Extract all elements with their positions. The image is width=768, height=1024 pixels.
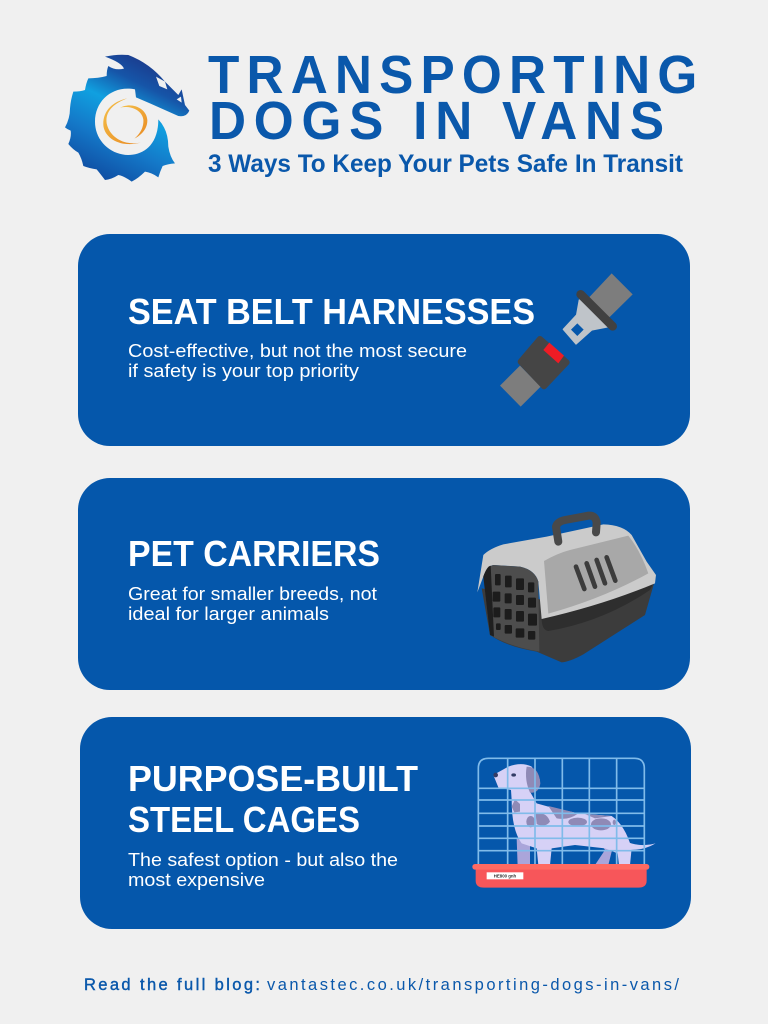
subtitle: 3 Ways To Keep Your Pets Safe In Transit bbox=[208, 150, 684, 178]
icon: dog in cage bbox=[472, 758, 656, 888]
panel: purpose-built steel cages bbox=[80, 717, 691, 929]
text: pet carriers description: ideal for larger animals bbox=[128, 603, 329, 624]
text: seat belt description: Cost-effective, but not the most secure bbox=[128, 340, 467, 361]
footer link bbox=[84, 976, 679, 994]
icon: pet carrier bbox=[477, 516, 656, 662]
heading: seat belt harnesses: SEAT BELT HARNESSES bbox=[128, 291, 535, 332]
text: steel cages description bbox=[128, 849, 398, 890]
heading: purpose-built steel cages: PURPOSE-BUILT bbox=[128, 758, 418, 799]
heading: pet carriers: PET CARRIERS bbox=[128, 533, 380, 574]
title: TRANSPORTING bbox=[208, 45, 697, 105]
text: pet carriers description: Great for smaller breeds, not bbox=[128, 583, 377, 604]
text: seat belt description: if safety is your top priority bbox=[128, 360, 360, 381]
footer link: vantastec.co.uk/transporting-dogs-in-vans/ bbox=[267, 976, 679, 994]
panel: seat belt harnesses bbox=[78, 234, 690, 446]
icon: dragon logo bbox=[65, 55, 189, 182]
heading: purpose-built steel cages bbox=[128, 758, 418, 840]
title: DOGS IN VANS bbox=[209, 91, 664, 151]
panel: pet carriers bbox=[78, 478, 690, 690]
text: steel cages description: most expensive bbox=[128, 869, 265, 890]
heading: purpose-built steel cages: STEEL CAGES bbox=[128, 799, 360, 840]
text: steel cages description: The safest option - but also the bbox=[128, 849, 398, 870]
footer link: Read the full blog: bbox=[84, 976, 260, 994]
icon: dog in cage: HE800 gnh bbox=[494, 873, 517, 878]
title bbox=[208, 45, 697, 151]
icon: seat belt buckle bbox=[500, 273, 633, 407]
text: pet carriers description bbox=[128, 583, 377, 624]
text: seat belt description bbox=[128, 340, 467, 381]
